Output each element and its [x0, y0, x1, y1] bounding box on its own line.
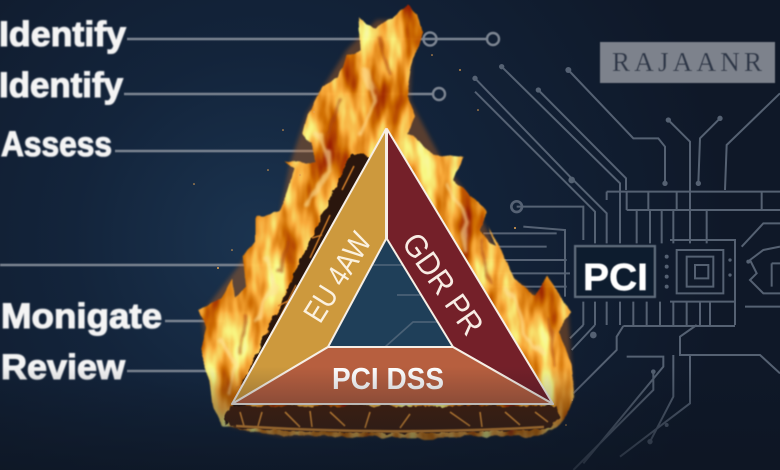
segment label: PCI DSS: PCI DSS: [332, 361, 444, 396]
inner triangle: [328, 239, 453, 347]
logo box: [600, 42, 775, 83]
triangle diagram: [232, 129, 553, 404]
segment label: GDR PR: GDR PR: [395, 226, 491, 342]
flames: [198, 3, 575, 438]
embers on edges: [236, 166, 548, 431]
label: Identify: Identify: [0, 66, 124, 105]
char: left edge: [224, 152, 376, 424]
chip: PCI: PCI: [583, 257, 648, 299]
label: Review: Review: [1, 348, 126, 387]
segment label: EU 4AW: EU 4AW: [296, 225, 379, 329]
circuit board traces: [472, 64, 780, 470]
segment: PCI DSS: [232, 347, 553, 404]
label: Identify: Identify: [0, 15, 127, 54]
segment: EU law: [232, 129, 386, 404]
sparks: [193, 54, 573, 426]
leader lines: [0, 32, 499, 371]
char: bottom edge: [226, 406, 559, 433]
label: Assess: Assess: [1, 125, 112, 164]
label: Monigate: Monigate: [1, 297, 162, 336]
chip: PCI: [575, 246, 655, 299]
logo box: RAJAANR: [612, 47, 762, 77]
step labels: [0, 15, 162, 387]
segment: GDPR: [387, 129, 553, 404]
charred edges: [224, 152, 559, 433]
